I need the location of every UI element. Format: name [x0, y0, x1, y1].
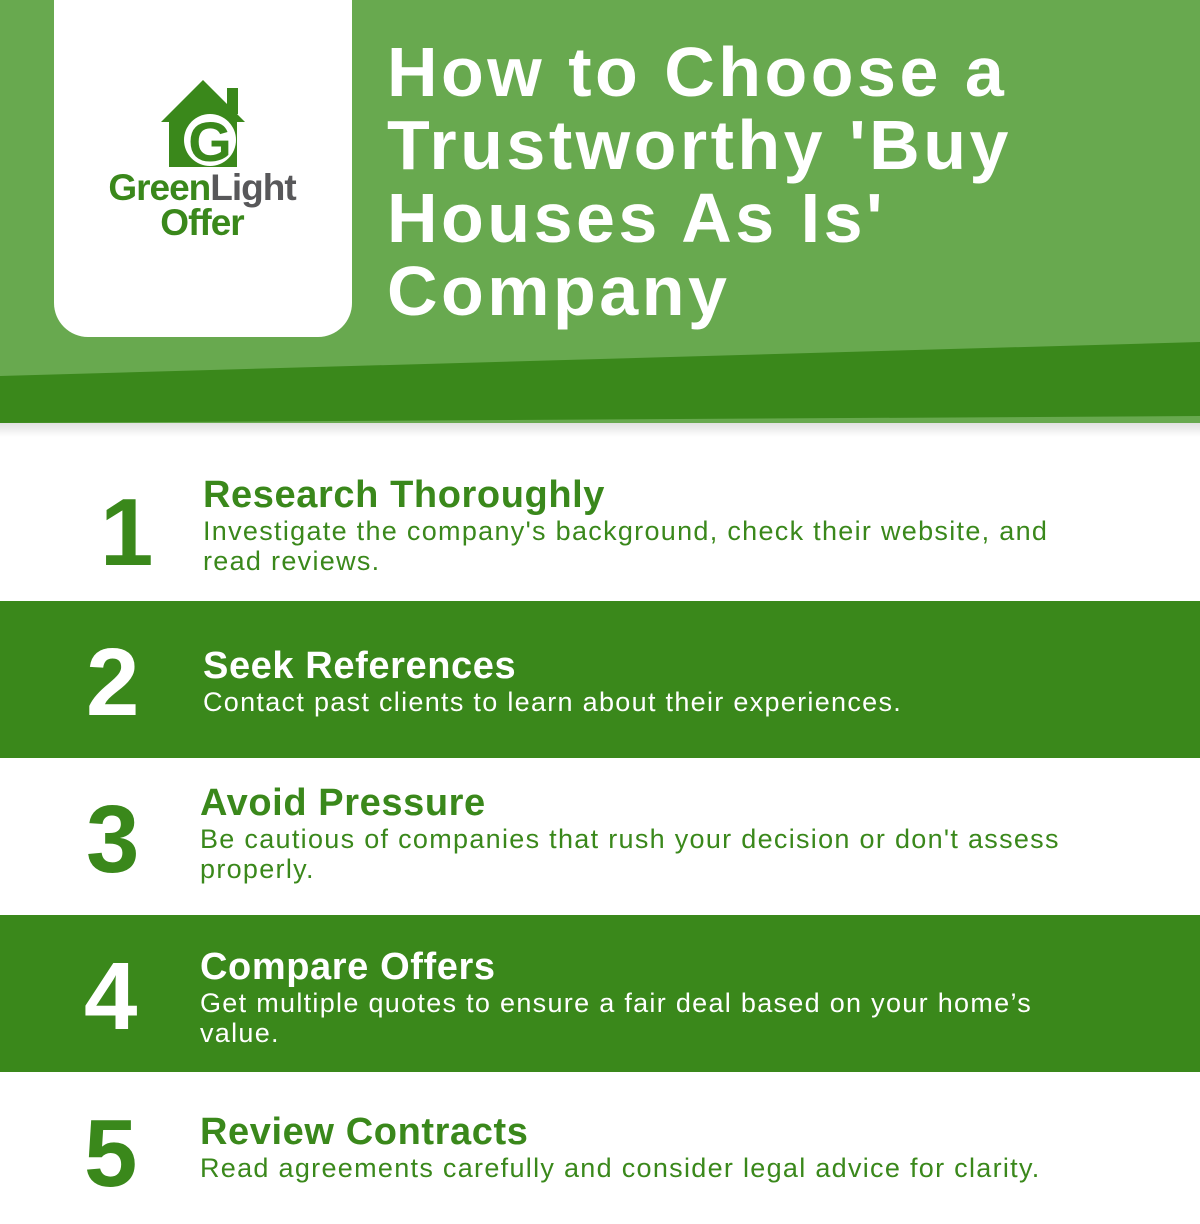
step 2: Contact past clients to learn about their experiences.	[203, 687, 902, 717]
title: Trustworthy 'Buy	[387, 106, 1012, 184]
title: How to Choose a	[387, 33, 1007, 111]
logo text: Offer	[160, 202, 244, 243]
logo text: GreenLight	[108, 167, 296, 208]
logo card	[54, 0, 352, 337]
step 5: Read agreements carefully and consider legal advice for clarity.	[200, 1153, 1041, 1183]
step 3: properly.	[200, 854, 315, 884]
logo text	[108, 167, 296, 243]
step 1: 1	[100, 479, 153, 586]
step 2: Seek References	[203, 645, 516, 687]
step 3: Avoid Pressure	[200, 782, 486, 824]
step 4: 4	[84, 943, 137, 1050]
step 2: 2	[86, 629, 139, 736]
step 5	[84, 1100, 1041, 1207]
step 3	[86, 782, 1060, 893]
step 4: Get multiple quotes to ensure a fair deal based on your home’s	[200, 988, 1032, 1018]
step 4	[0, 915, 1200, 1072]
step 2	[0, 601, 1200, 758]
step 3: Be cautious of companies that rush your decision or don't assess	[200, 824, 1060, 854]
step 5: 5	[84, 1100, 137, 1207]
step 1: read reviews.	[203, 546, 380, 576]
step 5: Review Contracts	[200, 1111, 528, 1153]
step 4: Compare Offers	[200, 946, 496, 988]
step 3: 3	[86, 786, 139, 893]
icon: house with G	[161, 80, 245, 170]
step 4: value.	[200, 1018, 280, 1048]
title: Company	[387, 252, 730, 330]
title	[387, 33, 1012, 330]
step 1: Research Thoroughly	[203, 474, 605, 516]
step 1	[100, 474, 1048, 586]
title: Houses As Is'	[387, 179, 886, 257]
step 1: Investigate the company's background, check their website, and	[203, 516, 1048, 546]
header background	[0, 0, 1200, 433]
